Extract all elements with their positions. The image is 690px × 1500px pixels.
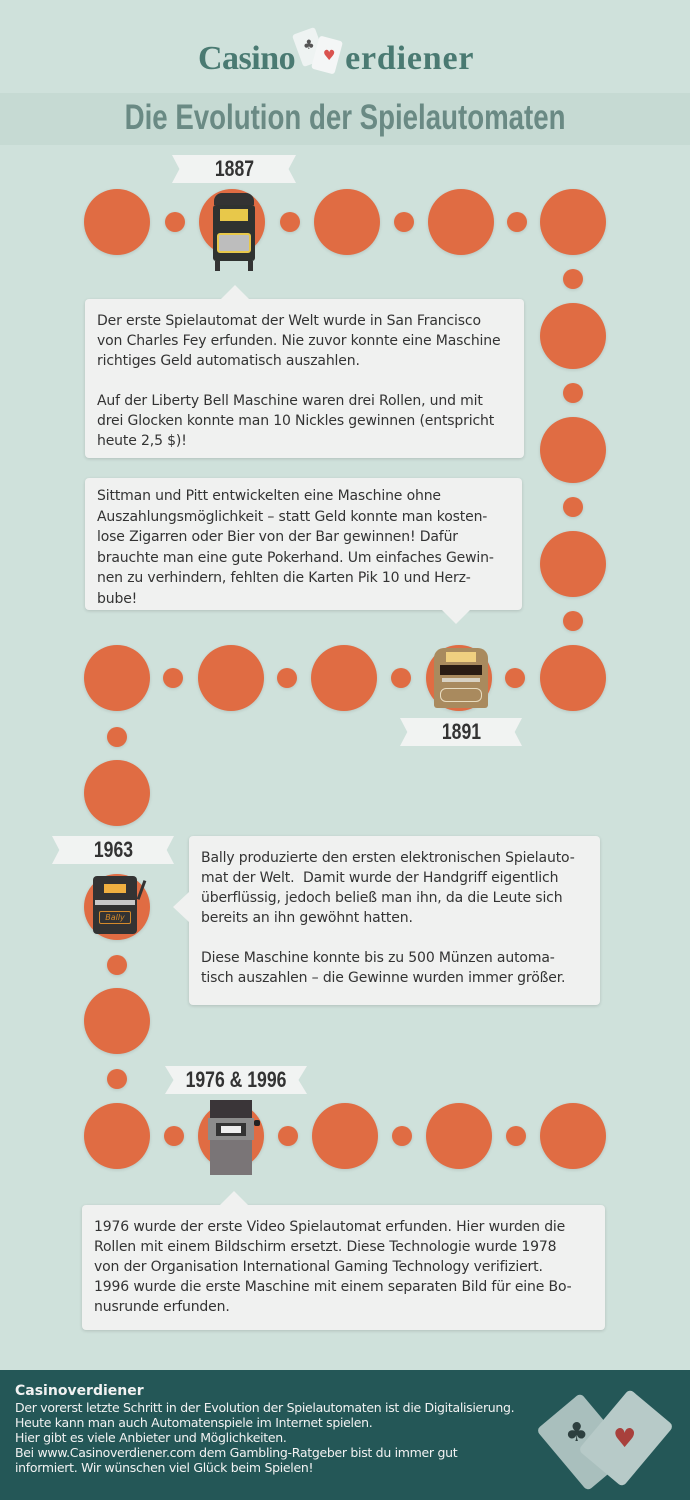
text box 1891: Sittman und Pitt entwickelten eine Maschine ohne	[97, 488, 441, 504]
banner 1891: 1891	[441, 719, 481, 744]
pointer down	[442, 610, 470, 624]
footer text: Bei www.Casinoverdiener.com dem Gambling-Ratgeber bist du immer gut	[15, 1445, 457, 1460]
text box 1976: 1996 wurde die erste Maschine mit einem separaten Bild für eine Bo-	[94, 1279, 572, 1295]
text box 1891: brauchte man eine gute Pokerhand. Um einfaches Gewin-	[97, 550, 494, 566]
text box 1976: von der Organisation International Gaming Technology verifiziert.	[94, 1259, 543, 1275]
logo: Casino erdiener	[198, 40, 474, 77]
footer text: Der vorerst letzte Schritt in der Evolution der Spielautomaten ist die Digitalisierung.	[15, 1400, 514, 1415]
text box 1887: heute 2,5 $)!	[97, 433, 187, 449]
text box 1976: nusrunde erfunden.	[94, 1299, 230, 1315]
icon: footer cards: ♣	[565, 1418, 588, 1448]
text box 1963: überflüssig, jedoch beließ man ihn, da die Leute sich	[201, 890, 562, 906]
icon: liberty bell machine	[213, 193, 255, 271]
text box 1887: Auf der Liberty Bell Maschine waren drei Rollen, und mit	[97, 393, 483, 409]
footer text: Hier gibt es viele Anbieter und Möglichkeiten.	[15, 1430, 287, 1445]
footer text: Heute kann man auch Automatenspiele im Internet spielen.	[15, 1415, 372, 1430]
text box 1976	[82, 1205, 605, 1330]
banner 1887	[172, 155, 296, 183]
text box 1887: Der erste Spielautomat der Welt wurde in San Francisco	[97, 313, 481, 329]
title band: Die Evolution der Spielautomaten	[125, 98, 565, 137]
text box 1963: bereits an ihn gewöhnt hatten.	[201, 910, 413, 926]
icon: 1891 poker machine	[434, 648, 488, 708]
text box 1891: bube!	[97, 590, 137, 606]
icon: bally machine: Bally	[105, 913, 125, 922]
icon: logo cards: ♥	[323, 48, 336, 64]
text box 1976: 1976 wurde der erste Video Spielautomat erfunden. Hier wurden die	[94, 1219, 565, 1235]
footer text	[15, 1383, 514, 1475]
footer	[0, 1370, 690, 1500]
text box 1963: Diese Maschine konnte bis zu 500 Münzen automa-	[201, 950, 555, 966]
text box 1887: richtiges Geld automatisch auszahlen.	[97, 353, 360, 369]
title band	[0, 93, 690, 145]
banner 1963: 1963	[93, 837, 133, 862]
text box 1976: Rollen mit einem Bildschirm ersetzt. Diese Technologie wurde 1978	[94, 1239, 556, 1255]
banner 1976 & 1996: 1976 & 1996	[186, 1067, 286, 1092]
icon: video slot	[208, 1100, 260, 1175]
pointer left	[173, 892, 189, 922]
icon: footer cards	[538, 1390, 672, 1490]
text box 1891	[85, 478, 522, 610]
banner 1976 & 1996	[165, 1066, 307, 1094]
timeline dots	[84, 189, 606, 1170]
text box 1891: Auszahlungsmöglichkeit – statt Geld konnte man kosten-	[97, 508, 487, 524]
text box 1963: mat der Welt. Damit wurde der Handgriff eigentlich	[201, 870, 558, 886]
text box 1887: von Charles Fey erfunden. Nie zuvor konnte eine Maschine	[97, 333, 500, 349]
banner 1891	[400, 718, 522, 746]
text box 1963	[189, 836, 600, 1005]
banner 1963	[52, 836, 174, 864]
pointer up	[221, 285, 249, 299]
pointer up	[220, 1191, 248, 1205]
footer text: Casinoverdiener	[15, 1383, 144, 1399]
text box 1891: lose Zigarren oder Bier von der Bar gewinnen! Dafür	[97, 529, 458, 545]
icon: bally machine	[93, 876, 146, 934]
text box 1963: Bally produzierte den ersten elektronischen Spielauto-	[201, 850, 575, 866]
text box 1891: nen zu verhindern, fehlten die Karten Pik 10 und Herz-	[97, 570, 471, 586]
text box 1887	[85, 299, 524, 458]
text box 1887: drei Glocken konnte man 10 Nickles gewinnen (entspricht	[97, 413, 494, 429]
footer text: informiert. Wir wünschen viel Glück beim Spielen!	[15, 1460, 313, 1475]
icon: logo cards	[292, 28, 342, 74]
icon: logo cards: ♣	[303, 38, 315, 53]
text box 1963: tisch auszahlen – die Gewinne wurden immer größer.	[201, 970, 565, 986]
banner 1887: 1887	[214, 156, 254, 181]
icon: footer cards: ♥	[613, 1424, 636, 1454]
